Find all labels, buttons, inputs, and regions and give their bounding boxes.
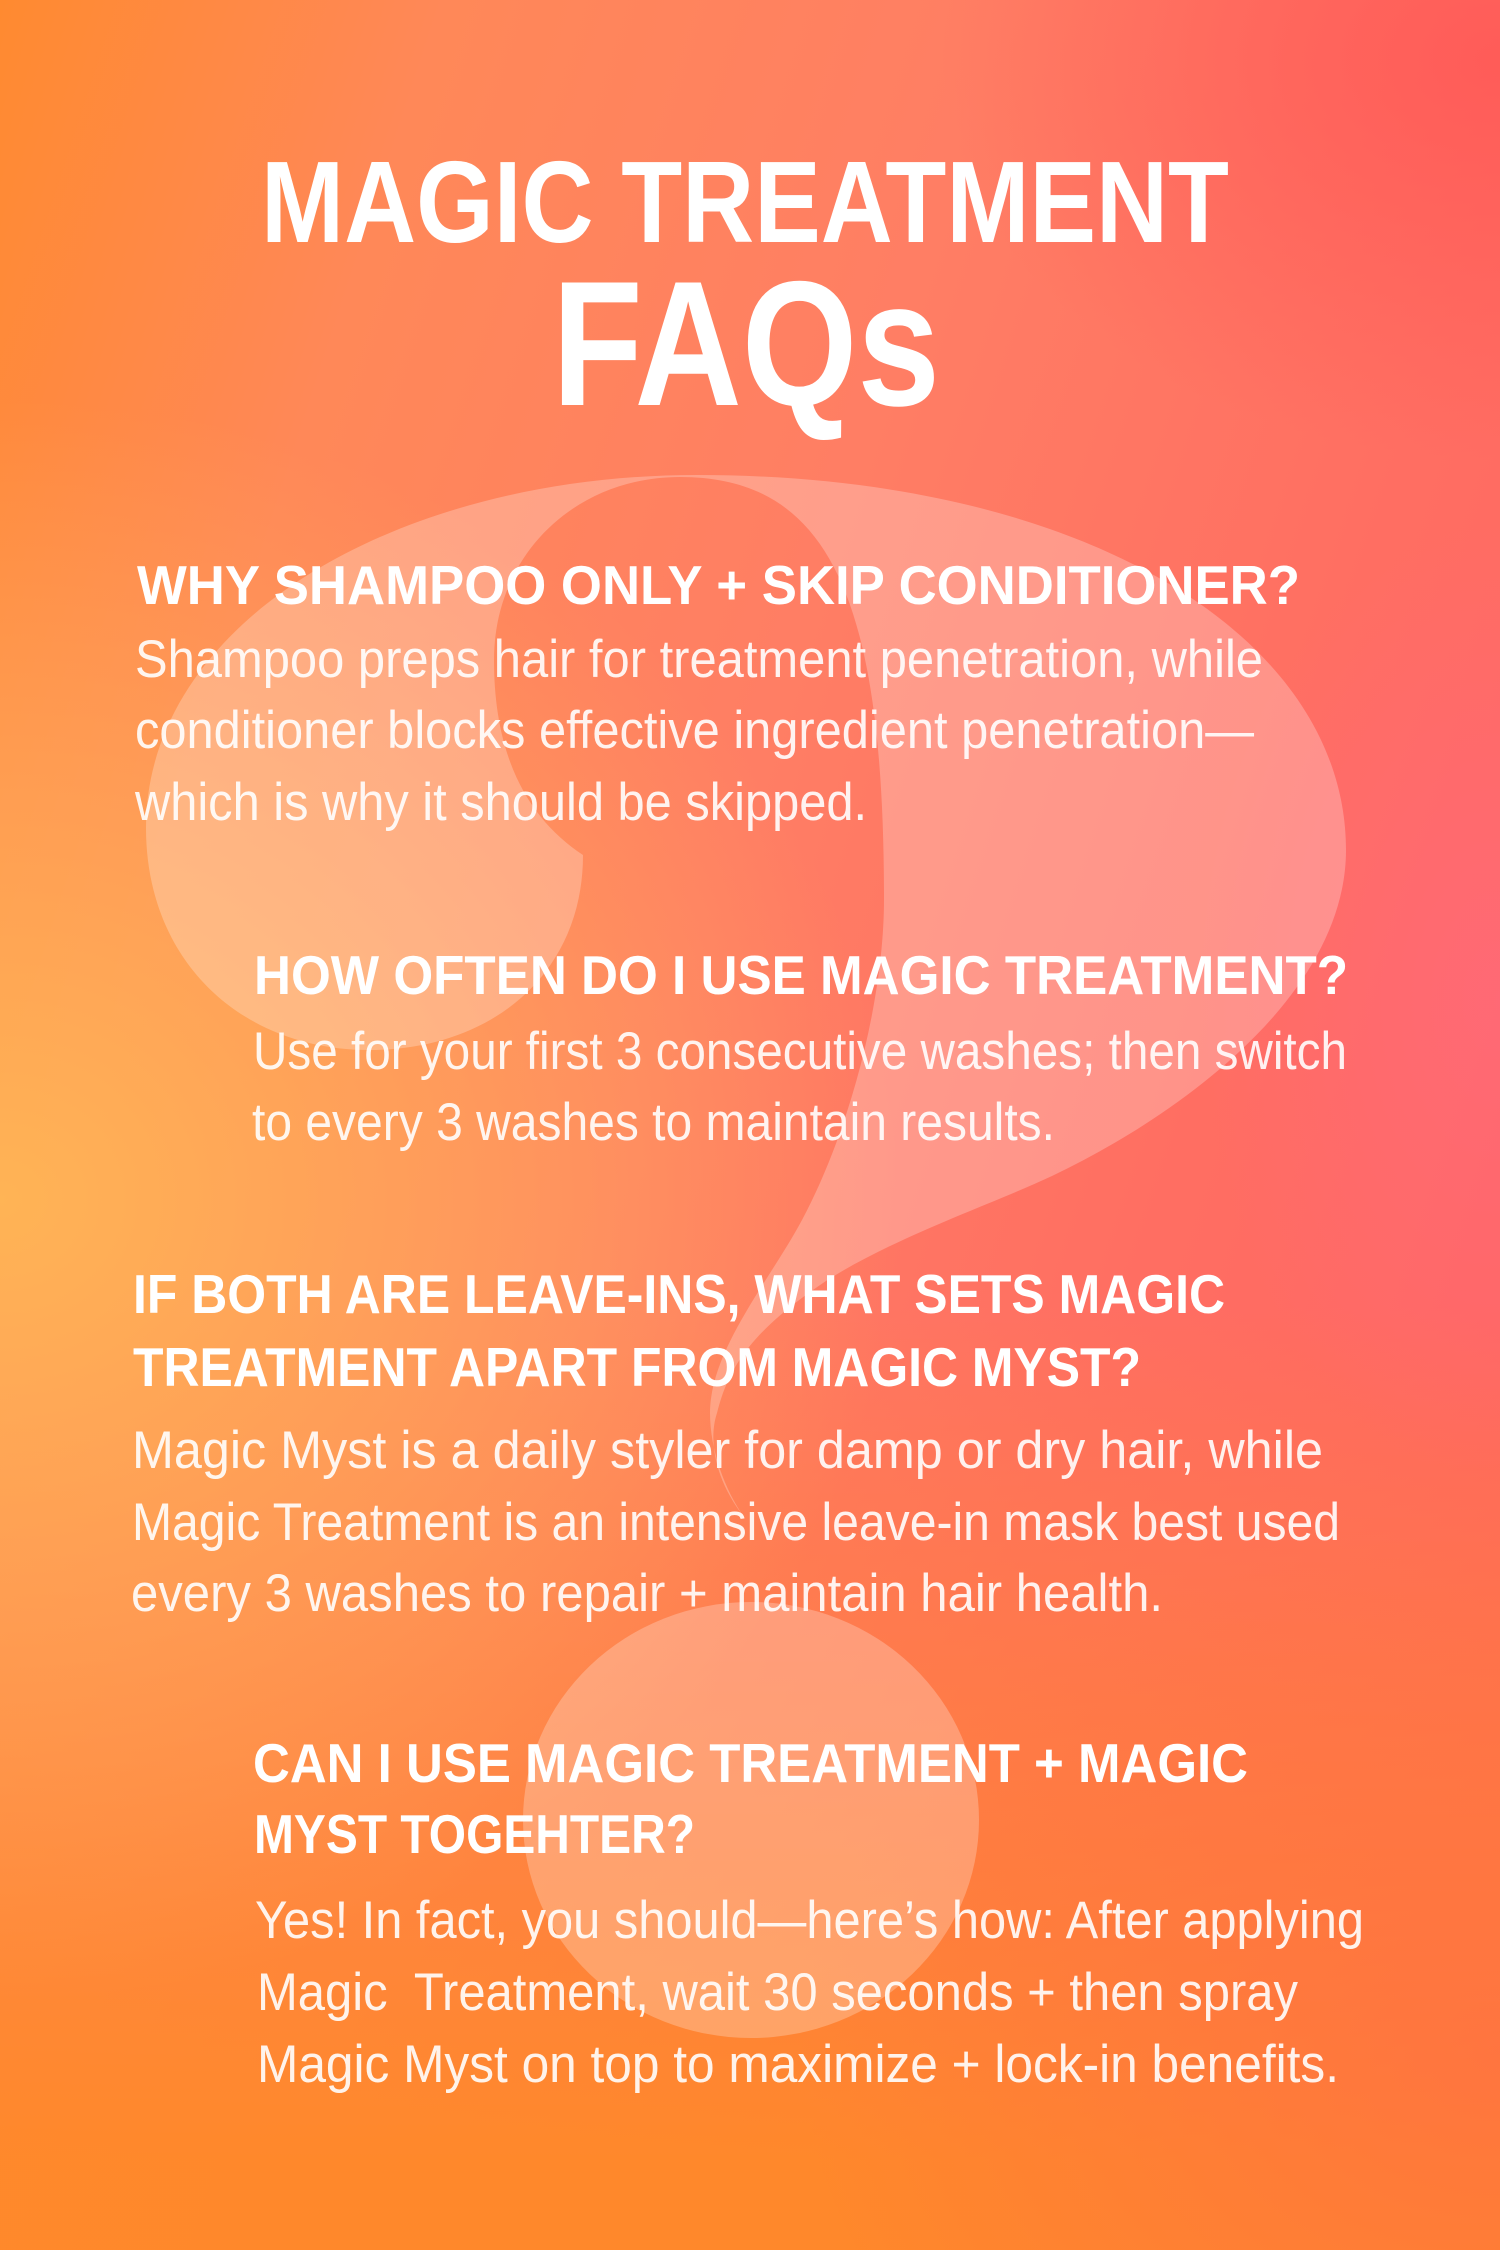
answer 3 text: every 3 washes to repair + maintain hair health.: [131, 1564, 1163, 1623]
question 2 heading: HOW OFTEN DO I USE MAGIC TREATMENT?: [254, 944, 1348, 1006]
question 4 heading: MYST TOGEHTER?: [254, 1803, 695, 1865]
answer 1 text: [134, 630, 1263, 832]
FAQ 2: [252, 944, 1348, 1152]
answer 4 text: [255, 1891, 1364, 2094]
question 4 heading: CAN I USE MAGIC TREATMENT + MAGIC: [253, 1732, 1248, 1794]
answer 1 text: Shampoo preps hair for treatment penetration, while: [135, 630, 1263, 689]
title line one: MAGIC TREATMENT: [261, 137, 1229, 267]
answer 2 text: [252, 1022, 1347, 1152]
FAQ 4: [253, 1732, 1364, 2094]
answer 2 text: to every 3 washes to maintain results.: [252, 1093, 1055, 1152]
question 3 heading: IF BOTH ARE LEAVE-INS, WHAT SETS MAGIC: [133, 1263, 1225, 1325]
question 1 heading: WHY SHAMPOO ONLY + SKIP CONDITIONER?: [137, 554, 1300, 616]
FAQ 3: [131, 1263, 1340, 1623]
FAQ 1: [134, 554, 1300, 832]
question 3 heading: [133, 1263, 1225, 1398]
answer 1 text: conditioner blocks effective ingredient penetration—: [135, 701, 1254, 760]
answer 3 text: Magic Treatment is an intensive leave-in mask best used: [132, 1493, 1340, 1552]
title line two: FAQs: [552, 244, 940, 443]
answer 4 text: Yes! In fact, you should—here’s how: After applying: [255, 1891, 1364, 1950]
answer 4 text: Magic Myst on top to maximize + lock-in benefits.: [257, 2035, 1339, 2094]
question mark hook and stem: [146, 475, 1346, 1517]
answer 3 text: [131, 1421, 1340, 1623]
answer 2 text: Use for your first 3 consecutive washes; then switch: [253, 1022, 1347, 1081]
question 4 heading: [253, 1732, 1248, 1865]
question mark dot: [523, 1602, 979, 2038]
answer 1 text: which is why it should be skipped.: [134, 773, 867, 832]
answer 4 text: Magic Treatment, wait 30 seconds + then spray: [257, 1963, 1298, 2022]
title: [261, 137, 1229, 443]
question 3 heading: TREATMENT APART FROM MAGIC MYST?: [133, 1336, 1141, 1398]
icon: large translucent question mark: [146, 475, 1346, 2038]
answer 3 text: Magic Myst is a daily styler for damp or dry hair, while: [132, 1421, 1323, 1480]
